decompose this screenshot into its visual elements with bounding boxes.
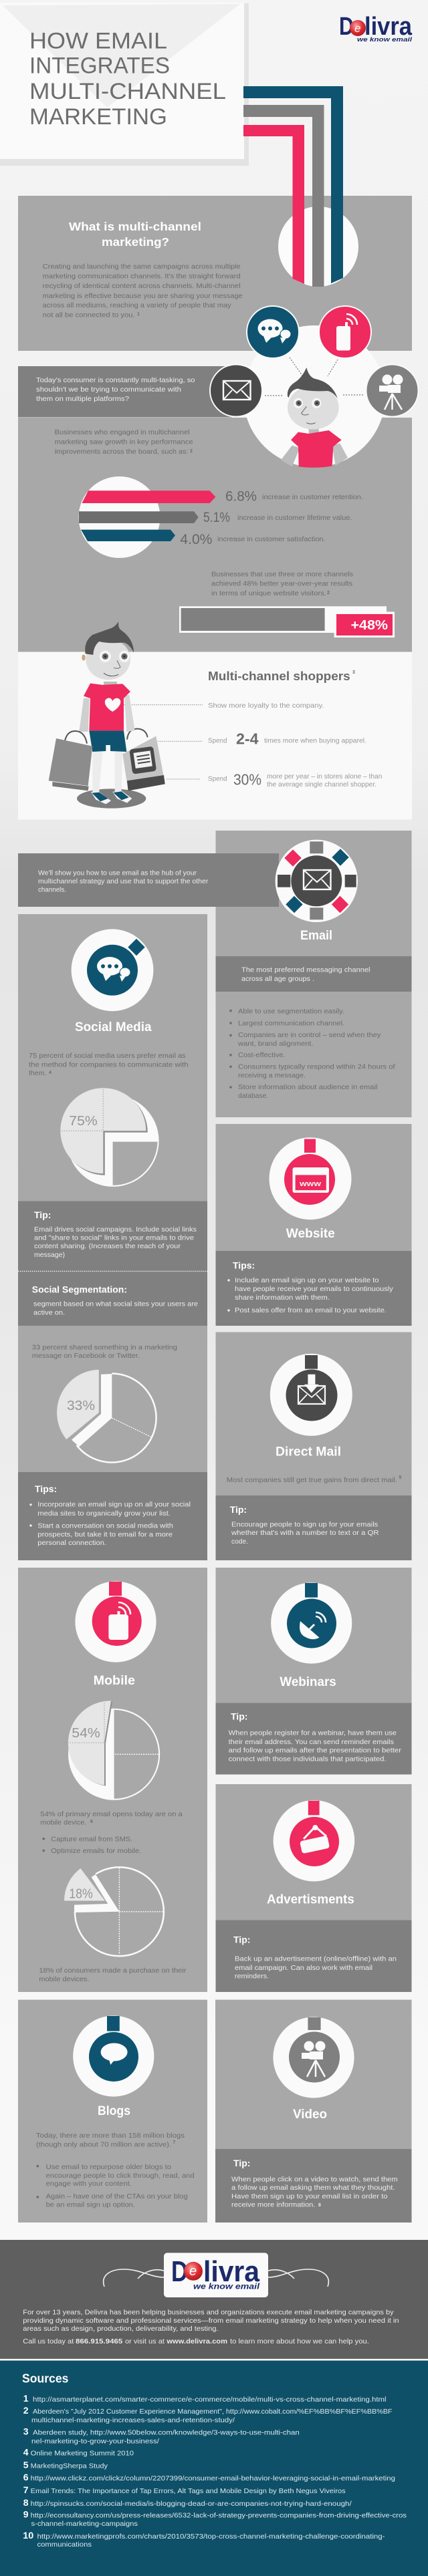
- list: email benefits: Able to use segmentation easily.: [238, 1008, 344, 1016]
- icon: mobile: [319, 306, 371, 358]
- panel: video tip: 8: [318, 2203, 321, 2208]
- source 4: [23, 2447, 134, 2458]
- icon: direct mail: [270, 1354, 352, 1436]
- text block: 18 percent purchase: 18% of consumers made a purchase on their: [39, 1967, 187, 1975]
- list: blogs tips: be an email sign up option.: [46, 2200, 135, 2208]
- panel: hub intro bar: We'll show you how to use email as the hub of your: [38, 869, 197, 877]
- source 7: 7: [23, 2484, 29, 2495]
- heading: blogs: Blogs: [98, 2104, 130, 2118]
- panel: title envelope: [0, 3, 249, 166]
- source 6: [23, 2472, 395, 2482]
- text block: businesses growth: Businesses who engaged in multichannel: [55, 428, 190, 436]
- panel: social media tips: active on.: [33, 1308, 65, 1316]
- icon: webinars: [271, 1582, 352, 1664]
- text block: true gains: Most companies still get true gains from direct mail.: [227, 1476, 397, 1484]
- text block: about Delivra: For over 13 years, Delivra has been helping businesses and organizations execute email marketing campaigns by: [23, 2308, 394, 2316]
- panel: sources: [0, 2361, 428, 2576]
- panel: advertisements tip: reminders.: [235, 1972, 269, 1980]
- panel: webinars tip: and follow up emails after the presentation to better: [229, 1746, 402, 1754]
- list: blogs tips: [36, 2163, 195, 2208]
- panel: consumer multi-tasking bar: them on multiple platforms?: [36, 395, 129, 403]
- panel: social media tips: Social Segmentation:: [32, 1284, 127, 1295]
- chart: 33 percent pie: [57, 1370, 156, 1462]
- panel: video tip: a follow up email asking them what they thought.: [231, 2184, 395, 2192]
- title: MULTI-CHANNEL: [29, 79, 226, 104]
- arrow: three coloured stripes: [243, 86, 343, 287]
- text block: 75 percent: [29, 1052, 189, 1077]
- source 6: http://www.clickz.com/clickz/column/2207399/consumer-email-behavior-leveraging-social-in-email-marketing: [31, 2474, 395, 2482]
- illustration: person with channels: [243, 325, 385, 468]
- bar: customer retention: 6.8%: [225, 489, 257, 504]
- source 9: s-channel-marketing-campaigns: [31, 2520, 138, 2528]
- heading: advertisements: Advertisments: [267, 1893, 354, 1907]
- panel: advertisements tip: email campaign. Can also work with email: [235, 1964, 372, 1972]
- logo: Delivra top: we know email: [357, 36, 412, 43]
- stat: loyalty: Show more loyalty to the company.: [208, 702, 324, 710]
- panel: lower grey stats: [18, 366, 412, 652]
- bar: customer lifetime value: [79, 510, 352, 525]
- heading: what is multi-channel marketing: What is multi-channel: [69, 220, 201, 233]
- text block: about Delivra: providing dynamic software and professional services—from email marketing strategy to help when you need it in: [23, 2317, 399, 2325]
- title: HOW EMAIL: [29, 28, 167, 53]
- panel: social segmentation stats: [18, 1326, 207, 1560]
- logo: Delivra footer: D: [171, 2255, 188, 2288]
- list: mobile tips: Capture email from SMS.: [51, 1835, 132, 1843]
- heading: direct mail: Direct Mail: [276, 1445, 341, 1459]
- text block: 75 percent: them.: [29, 1069, 46, 1077]
- panel: advertisements: [215, 1784, 412, 1992]
- text block: definition: marketing communication channels. It's the straight forward: [43, 273, 241, 281]
- chart: 33 percent pie: 33%: [67, 1399, 95, 1413]
- panel: website tips: [215, 1251, 412, 1326]
- source 3: nel-marketing-to-grow-your-business/: [31, 2437, 159, 2445]
- text block: true gains: 5: [399, 1475, 401, 1480]
- panel: hub intro bar: [18, 853, 279, 907]
- source 4: Online Marketing Summit 2010: [31, 2450, 134, 2458]
- heading: sources: Sources: [22, 2372, 68, 2385]
- stat: 2-4 times more: times more when buying apparel.: [264, 736, 366, 744]
- logo: Delivra top: livra: [364, 13, 413, 41]
- text block: 75 percent: 75 percent of social media users prefer email as: [29, 1052, 186, 1060]
- panel: direct mail tip: whether that's with a number to text or a QR: [231, 1529, 379, 1537]
- panel: website tips: Include an email sign up on your website to: [235, 1276, 379, 1284]
- panel: social tips: prospects, but take it to email for a more: [37, 1531, 173, 1539]
- panel: webinars tip: their email address. You can send reminder emails: [229, 1738, 394, 1746]
- text block: 54 percent opens: [40, 1810, 183, 1827]
- panel: social media tips: segment based on what social sites your users are: [33, 1300, 198, 1308]
- panel: social tips: Tips:: [35, 1483, 57, 1494]
- source 8: 8: [23, 2497, 29, 2508]
- callout: most preferred: The most preferred messaging channel: [241, 966, 370, 974]
- source 10: [23, 2530, 385, 2549]
- panel: webinars: [215, 1568, 412, 1775]
- panel: Delivra footer: [0, 2240, 428, 2359]
- icon: website: [269, 1137, 352, 1220]
- panel: direct mail: [215, 1332, 412, 1560]
- text block: definition: [43, 263, 243, 319]
- source 4: 4: [23, 2447, 29, 2458]
- logo: Delivra footer: [164, 2253, 268, 2297]
- source 9: [23, 2509, 407, 2528]
- source 3: Aberdeen study, http://www.50below.com/knowledge/3-ways-to-use-multi-chan: [33, 2429, 300, 2437]
- panel: blogs: [18, 2000, 207, 2223]
- logo: Delivra footer: we know email: [193, 2281, 260, 2291]
- icon: email hub: [276, 840, 358, 922]
- text block: 54 percent opens: mobile device.: [40, 1819, 86, 1827]
- panel: consumer multi-tasking bar: [18, 366, 232, 417]
- source 8: http://spinsucks.com/social-media/is-blogging-dead-or-are-companies-not-trying-hard-enough/: [31, 2500, 352, 2508]
- text block: three or more channels: [211, 570, 353, 597]
- heading: multi-channel shoppers: Multi-channel shoppers: [208, 669, 350, 683]
- text block: 75 percent: the method for companies to communicate with: [29, 1060, 189, 1068]
- panel: social tips: Incorporate an email sign up on all your social: [37, 1501, 191, 1509]
- source 7: [23, 2484, 346, 2495]
- panel: consumer multi-tasking bar: Today's consumer is constantly multi-tasking, so: [36, 376, 195, 384]
- illustration: shopper: [49, 621, 165, 809]
- stat: 30 percent more: 30%: [233, 771, 261, 789]
- list: blogs tips: engage with your content.: [46, 2180, 132, 2188]
- list: blogs tips: Again – have one of the CTAs on your blog: [46, 2192, 188, 2200]
- icon: white circle with three stripes: [278, 206, 358, 287]
- panel: website tips: share information with them.: [235, 1294, 330, 1302]
- panel: video tip: When people click on a video to watch, send them: [231, 2176, 398, 2184]
- title: [29, 28, 226, 130]
- panel: webinars tip: When people register for a webinar, have them use: [229, 1729, 397, 1737]
- heading: what is multi-channel marketing: marketing?: [102, 235, 169, 249]
- list: email benefits: Consumers typically respond within 24 hours of: [238, 1063, 395, 1071]
- list: email benefits: Cost-effective.: [238, 1051, 285, 1059]
- bar: customer lifetime value: 5.1%: [203, 510, 230, 525]
- list: email benefits: receiving a message.: [238, 1072, 306, 1080]
- panel: direct mail tip: code.: [231, 1538, 248, 1546]
- bar: customer satisfaction: [81, 530, 325, 547]
- stat: 30 percent more: Spend: [208, 775, 227, 783]
- panel: social media tips: content sharing. (Increases the reach of your: [34, 1242, 181, 1250]
- heading: video: Video: [293, 2108, 327, 2122]
- source 5: MarketingSherpa Study: [31, 2462, 108, 2470]
- panel: video tip: Have them sign up to your email list in order to: [231, 2192, 388, 2200]
- bar: customer lifetime value: increase in customer lifetime value.: [237, 514, 352, 522]
- list: blogs tips: Use email to repurpose older blogs to: [46, 2163, 171, 2171]
- panel: social media tips: and "share to social" links in your emails to drive: [34, 1234, 194, 1242]
- source 3: 3: [23, 2426, 29, 2437]
- text block: definition: marketing is effective because you are sharing your message: [43, 292, 243, 300]
- text block: definition: 1: [137, 312, 140, 317]
- panel: social media tips: [18, 1201, 207, 1326]
- icon: blogs: [73, 2015, 154, 2097]
- panel: video tip: receive more information.: [231, 2200, 315, 2208]
- text block: blogs stat: (though only about 70 million are active).: [36, 2141, 171, 2149]
- source 5: [23, 2459, 108, 2470]
- text block: 75 percent: 4: [49, 1070, 51, 1075]
- text block: three or more channels: achieved 48% better year-over-year results: [211, 580, 352, 588]
- text block: three or more channels: in terms of unique website visitors.: [211, 589, 326, 597]
- panel: website tips: Tips:: [233, 1260, 255, 1270]
- logo: Delivra top: e: [354, 22, 360, 35]
- text block: three or more channels: 2: [327, 591, 330, 595]
- heading: mobile: Mobile: [94, 1674, 135, 1688]
- stat: 2-4 times more: Spend: [208, 736, 227, 744]
- list: email benefits: Largest communication channel.: [238, 1019, 344, 1027]
- source 5: 5: [23, 2459, 29, 2470]
- chart: 54 percent pie: 54%: [72, 1726, 100, 1741]
- panel: webinars tip: [215, 1703, 412, 1775]
- icon: social media: [72, 929, 153, 1011]
- chart: 75 percent pie: 75%: [69, 1114, 98, 1129]
- source 10: http://www.marketingprofs.com/charts/2010/3573/top-cross-channel-marketing-challenge-coordinating-: [37, 2533, 385, 2541]
- text block: call to action: or visit us at: [125, 2337, 165, 2345]
- panel: social tips: Start a conversation on social media with: [37, 1522, 173, 1530]
- stat: 30 percent more: [208, 771, 383, 789]
- panel: social tips: personal connection.: [37, 1539, 106, 1547]
- list: email benefits: want, brand alignment.: [237, 1040, 314, 1048]
- text block: about Delivra: areas such as design, production, deliverability, and testing.: [23, 2325, 219, 2333]
- chart: 54 percent pie: [63, 1701, 160, 1800]
- text block: call to action: Call us today at: [23, 2337, 74, 2345]
- source 2: 2: [23, 2405, 29, 2416]
- callout: most preferred: [215, 956, 412, 992]
- text block: 33 percent: 33 percent shared something in a marketing: [32, 1344, 177, 1352]
- bar: customer satisfaction: increase in customer satisfaction.: [217, 535, 325, 543]
- dashed connectors: [265, 357, 364, 396]
- list: email benefits: Store information about audience in email: [238, 1083, 377, 1091]
- source 2: multichannel-marketing-increases-sales-and-retention-study/: [31, 2416, 235, 2424]
- chart: plus 48 percent bar: +48%: [350, 618, 388, 633]
- text block: about Delivra: [23, 2308, 399, 2333]
- source 7: Email Trends: The Importance of Tap Errors, Alt Tags and Mobile Design by Beth Negus Viveiros: [31, 2487, 346, 2495]
- bar: customer retention: increase in customer retention.: [262, 493, 363, 501]
- source 10: 10: [23, 2530, 34, 2541]
- text block: businesses growth: 2: [190, 449, 193, 454]
- heading: email: Email: [300, 929, 332, 943]
- text block: blogs stat: [36, 2132, 185, 2149]
- icon: website: www: [299, 1180, 322, 1188]
- heading: what is multi-channel marketing: [69, 220, 201, 249]
- list: email benefits: database.: [238, 1092, 268, 1100]
- text block: call to action: [23, 2337, 369, 2345]
- panel: social media tips: Tip:: [34, 1209, 51, 1220]
- chart: 75 percent pie: [60, 1088, 159, 1187]
- source 9: http://econsultancy.com/us/press-releases/6532-lack-of-strategy-prevents-companies-from-driving-effective-cros: [31, 2511, 407, 2519]
- panel: advertisements tip: [215, 1920, 412, 1992]
- panel: direct mail tip: Tip:: [230, 1504, 247, 1515]
- panel: mobile: [18, 1568, 207, 1992]
- title: MARKETING: [29, 104, 167, 130]
- text block: 33 percent: [32, 1344, 177, 1360]
- source 2: Aberdeen's "July 2012 Customer Experience Management", http://www.cobalt.com/%EF%BB%BF%EF%BB%BF: [33, 2408, 392, 2416]
- panel: advertisements tip: Tip:: [233, 1934, 250, 1945]
- source 1: [23, 2393, 387, 2404]
- source 6: 6: [23, 2472, 29, 2482]
- title: INTEGRATES: [29, 53, 170, 79]
- heading: multi-channel shoppers: 3: [352, 670, 355, 675]
- logo: Delivra footer: e: [189, 2264, 197, 2279]
- chart: plus 48 percent bar: [179, 606, 395, 637]
- icon: advertisements: [274, 1800, 354, 1882]
- panel: webinars tip: Tip:: [231, 1711, 247, 1721]
- panel: video tip: Tip:: [233, 2158, 250, 2168]
- list: mobile tips: Optimize emails for mobile.: [51, 1847, 141, 1855]
- text block: call to action: www.delivra.com: [166, 2337, 227, 2345]
- text block: call to action: to learn more about how we can help you.: [230, 2337, 369, 2345]
- bar: customer satisfaction: 4.0%: [180, 532, 212, 547]
- stat: 2-4 times more: [208, 730, 366, 747]
- heading: website: Website: [286, 1227, 335, 1241]
- chart: 18 percent pie: [64, 1867, 164, 1956]
- icon: email: [210, 365, 262, 417]
- panel: website tips: Post sales offer from an email to your website.: [235, 1306, 387, 1314]
- panel: website: [215, 1124, 412, 1326]
- panel: webinars tip: connect with those individuals that participated.: [229, 1755, 387, 1763]
- panel: social media: [0, 914, 428, 2576]
- text block: definition: Creating and launching the same campaigns across multiple: [43, 263, 241, 271]
- icon: mobile channel: [75, 1581, 156, 1663]
- panel: social tips: media sites to organically grow your list.: [37, 1510, 171, 1518]
- text block: 54 percent opens: 6: [90, 1820, 93, 1824]
- text block: definition: recycling of identical content across channels. Multi-channel: [43, 282, 241, 290]
- panel: email channel: [18, 831, 412, 1117]
- list: email benefits: Companies are in control – send when they: [238, 1031, 381, 1039]
- decoration: logo swirls: [104, 2269, 328, 2287]
- panel: website tips: have people receive your emails to continuously: [235, 1285, 394, 1293]
- panel: social media tips: Email drives social campaigns. Include social links: [34, 1226, 197, 1234]
- text block: three or more channels: Businesses that use three or more channels: [211, 570, 353, 578]
- logo: Delivra top: [339, 13, 413, 43]
- panel: what is multi-channel marketing: [18, 196, 412, 351]
- text block: businesses growth: improvements across the board, such as:: [55, 448, 189, 456]
- text block: businesses growth: marketing saw growth in key performance: [55, 438, 193, 446]
- panel: video tip: [215, 2149, 412, 2223]
- person: [281, 368, 348, 468]
- panel: social tips: [18, 1472, 207, 1560]
- panel: direct mail tip: [215, 1495, 412, 1560]
- list: email benefits: [229, 1008, 395, 1100]
- icon: chat: [247, 306, 299, 358]
- stat: 30 percent more: more per year – in stores alone – than: [267, 772, 383, 780]
- text block: definition: not all be connected to you.: [43, 311, 135, 319]
- source 10: communications: [37, 2541, 92, 2549]
- panel: hub intro bar: channels.: [38, 885, 66, 893]
- logo: Delivra footer: livra: [203, 2255, 259, 2288]
- dotted connectors: [116, 705, 203, 779]
- panel: direct mail tip: Encourage people to sign up for your emails: [231, 1521, 378, 1529]
- text block: blogs stat: 7: [173, 2140, 175, 2145]
- list: mobile tips: [43, 1835, 141, 1855]
- stat: 30 percent more: the average single channel shopper.: [267, 780, 377, 789]
- panel: consumer multi-tasking bar: shouldn't we be trying to communicate with: [36, 386, 181, 394]
- panel: multi-channel shoppers: [18, 652, 412, 819]
- panel: hub intro bar: multichannel strategy and use that to support the other: [38, 877, 209, 885]
- text block: businesses growth: [55, 428, 193, 456]
- panel: video: [215, 2000, 412, 2223]
- source 1: http://asmarterplanet.com/smarter-commerce/e-commerce/mobile/multi-vs-cross-channel-marketing.html: [33, 2396, 387, 2404]
- source 2: [23, 2405, 392, 2424]
- text block: 18 percent purchase: mobile devices.: [39, 1975, 89, 1983]
- chart: 18 percent pie: 18%: [69, 1886, 93, 1901]
- callout: most preferred: across all age groups .: [241, 975, 314, 983]
- chart: three increase bars: [79, 476, 363, 558]
- text block: 33 percent: message on Facebook or Twitter.: [32, 1352, 140, 1360]
- source 8: [23, 2497, 352, 2508]
- text block: 18 percent purchase: [39, 1967, 187, 1983]
- text block: blogs stat: Today, there are more than 158 million blogs: [36, 2132, 185, 2140]
- logo: Delivra top: D: [339, 13, 354, 41]
- source 1: 1: [23, 2393, 29, 2404]
- source 3: [23, 2426, 300, 2445]
- source 9: 9: [23, 2509, 29, 2519]
- bar: customer retention: [82, 489, 363, 504]
- text block: call to action: 866.915.9465: [76, 2337, 122, 2345]
- panel: social media tips: message): [34, 1251, 65, 1259]
- heading: webinars: Webinars: [280, 1675, 336, 1689]
- panel: advertisements tip: Back up an advertisement (online/offline) with an: [235, 1955, 397, 1963]
- list: blogs tips: encourage people to click through, read, and: [46, 2172, 195, 2180]
- text block: definition: across all mediums, reaching a variety of people that may: [43, 301, 231, 309]
- icon: video camera: [366, 365, 419, 417]
- stat: 2-4 times more: 2-4: [236, 730, 259, 747]
- heading: social media: Social Media: [75, 1020, 152, 1034]
- icon: video: [273, 2017, 354, 2098]
- text block: 54 percent opens: 54% of primary email opens today are on a: [40, 1810, 183, 1818]
